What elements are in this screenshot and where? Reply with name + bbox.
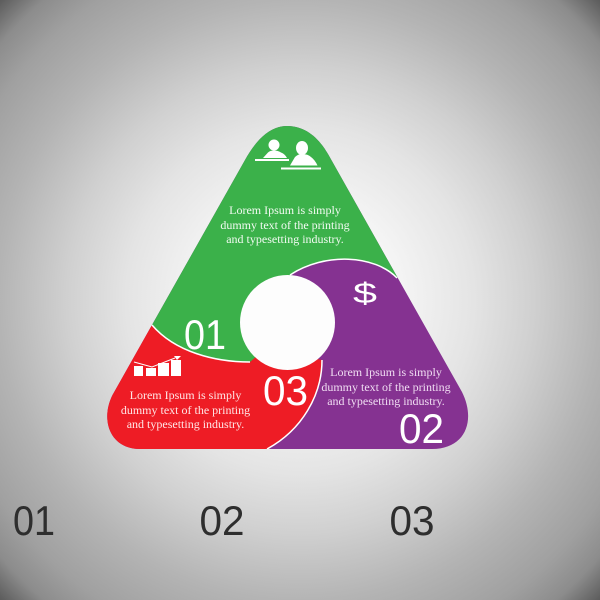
number 01: 01 (184, 311, 226, 358)
bottom label 03: 03 (390, 497, 434, 544)
text: purple segment: Lorem Ipsum is simply (330, 365, 442, 379)
rounded triangle diagram: and typesetting industry. (127, 417, 244, 431)
green segment (152, 126, 398, 362)
rounded triangle diagram: and typesetting industry. (226, 232, 344, 246)
number 02: 02 (399, 405, 444, 452)
rounded triangle diagram (107, 126, 468, 449)
icon: bar chart (134, 356, 181, 376)
bottom label 01: 01 (13, 497, 55, 544)
number 03: 03 (263, 367, 308, 414)
purple segment (107, 126, 468, 449)
icon: people at desks (255, 140, 321, 170)
bottom label 02: 02 (200, 497, 244, 544)
rounded triangle diagram: and typesetting industry. (327, 394, 445, 408)
red segment (107, 325, 322, 449)
rounded triangle diagram: dummy text of the printing (220, 218, 350, 232)
text: red segment: Lorem Ipsum is simply (130, 388, 241, 402)
rounded triangle diagram: dummy text of the printing (121, 403, 250, 417)
rounded triangle diagram: dummy text of the printing (321, 380, 451, 394)
text: green segment: Lorem Ipsum is simply (229, 203, 341, 217)
icon: dollar: $ (353, 278, 377, 310)
centre circle (240, 275, 335, 370)
